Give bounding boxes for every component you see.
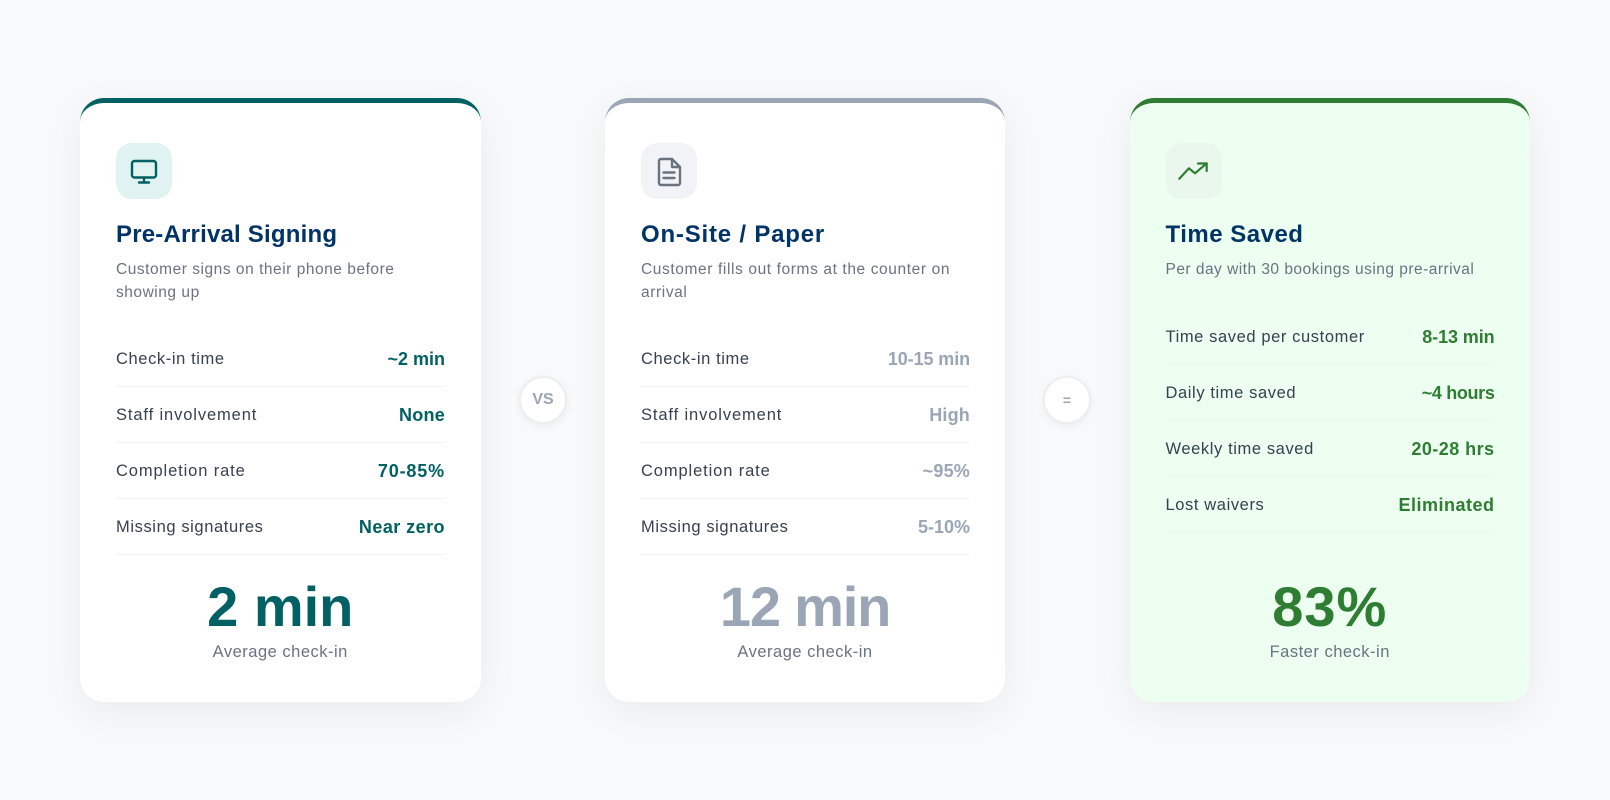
row: daily time saved: [1166, 365, 1494, 421]
icon: monitor: [116, 143, 172, 199]
row: time saved per customer: Time saved per customer: [1166, 328, 1365, 346]
row: staff involvement: High: [929, 405, 970, 425]
row: missing signatures: Near zero: [359, 517, 445, 537]
big stat: 83%: [1272, 575, 1387, 638]
row: completion rate: [116, 443, 445, 499]
badge: equals: [1043, 376, 1091, 424]
row: weekly time saved: Weekly time saved: [1166, 440, 1314, 458]
badge: equals: =: [1063, 392, 1071, 408]
row: daily time saved: Daily time saved: [1166, 384, 1296, 402]
row: missing signatures: 5-10%: [918, 517, 970, 537]
row: completion rate: Completion rate: [116, 462, 246, 480]
heading: pre-arrival signing: Pre-Arrival Signing: [116, 221, 337, 248]
description: [641, 261, 950, 301]
row: staff involvement: Staff involvement: [116, 406, 257, 424]
row: staff involvement: [116, 387, 445, 443]
panel: pre-arrival signing: [80, 98, 480, 702]
row: missing signatures: [641, 499, 970, 555]
row: missing signatures: Missing signatures: [641, 518, 788, 536]
row: missing signatures: Missing signatures: [116, 518, 263, 536]
stat label: Average check-in: [737, 642, 873, 660]
row: daily time saved: ~4 hours: [1422, 382, 1494, 402]
icon: document: [641, 143, 697, 199]
panel: time saved: [1130, 98, 1530, 702]
row: lost waivers: Eliminated: [1398, 494, 1494, 514]
row: staff involvement: Staff involvement: [641, 406, 782, 424]
description: [116, 261, 394, 301]
description: Customer fills out forms at the counter on: [641, 261, 950, 278]
badge: vs: [519, 376, 567, 424]
row: weekly time saved: 20-28 hrs: [1411, 438, 1494, 458]
description: Customer signs on their phone before: [116, 261, 394, 278]
stat label: Faster check-in: [1270, 642, 1390, 660]
badge: vs: VS: [532, 391, 554, 408]
row: staff involvement: [641, 387, 970, 443]
row: lost waivers: Lost waivers: [1166, 496, 1264, 514]
description: arrival: [641, 284, 687, 301]
row: check-in time: Check-in time: [116, 350, 225, 368]
row: check-in time: Check-in time: [641, 350, 750, 368]
row: check-in time: [116, 331, 445, 387]
row: check-in time: [641, 331, 970, 387]
row: lost waivers: [1166, 477, 1494, 533]
heading: time saved: Time Saved: [1166, 221, 1303, 248]
row: completion rate: [641, 443, 970, 499]
row: completion rate: Completion rate: [641, 462, 771, 480]
row: check-in time: ~2 min: [387, 349, 445, 369]
description: showing up: [116, 284, 200, 301]
heading: on-site paper: On-Site / Paper: [641, 221, 825, 248]
row: missing signatures: [116, 499, 445, 555]
big stat: 2 min: [207, 575, 353, 638]
row: weekly time saved: [1166, 421, 1494, 477]
stat label: Average check-in: [213, 642, 348, 660]
description: Per day with 30 bookings using pre-arrival: [1166, 261, 1474, 278]
row: time saved per customer: [1166, 309, 1494, 365]
icon: trending up: [1166, 143, 1222, 199]
row: staff involvement: None: [399, 405, 445, 425]
row: completion rate: ~95%: [923, 461, 970, 481]
row: time saved per customer: 8-13 min: [1422, 326, 1494, 346]
panel: on-site paper: [605, 98, 1005, 702]
big stat: 12 min: [720, 575, 890, 638]
row: check-in time: 10-15 min: [888, 349, 970, 369]
row: completion rate: 70-85%: [378, 461, 445, 481]
